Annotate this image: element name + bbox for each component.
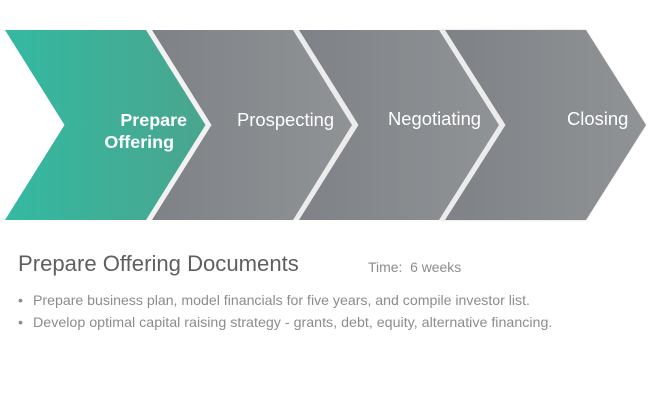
chevron: Prospecting — [151, 30, 358, 220]
chevron: Closing — [440, 29, 646, 221]
heading: Prepare Offering Documents — [18, 251, 299, 276]
time estimate: Time: 6 weeks — [368, 259, 461, 275]
label: Prepare Offering: Prepare — [120, 110, 187, 130]
bullet 2: Develop optimal capital raising strategy - grants, debt, equity, alternative financing. — [33, 314, 552, 330]
label: Negotiating: Negotiating — [388, 108, 481, 129]
label: Prepare Offering: Offering — [104, 132, 174, 152]
label: Prepare Offering — [104, 110, 187, 152]
bullet list — [18, 292, 552, 330]
chevron: Prepare Offering — [5, 30, 212, 220]
label: Closing: Closing — [567, 108, 628, 129]
bullet 1: • — [18, 292, 23, 308]
chevron: Negotiating — [298, 30, 506, 220]
label: Prospecting: Prospecting — [237, 109, 334, 130]
bullet 2: • — [18, 314, 23, 330]
bullet 1: Prepare business plan, model financials for five years, and compile investor list. — [33, 292, 530, 308]
